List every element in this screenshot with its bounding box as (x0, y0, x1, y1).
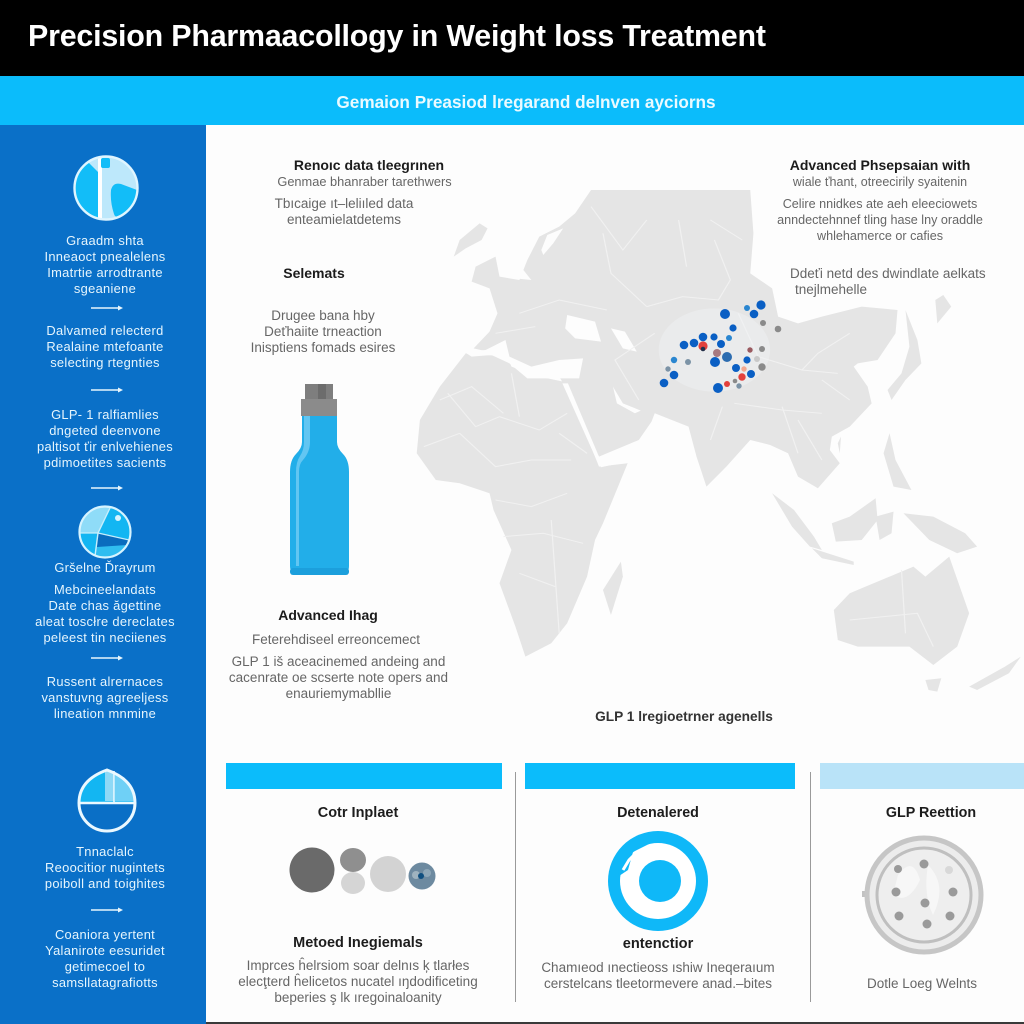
text: top-right block (777, 157, 986, 297)
description: cacenrate oe scserte note opers and (229, 670, 448, 685)
text: block 3: dngeted deenvone (49, 423, 161, 438)
title: Precision Pharmaacollogy in Weight loss Treatment (28, 19, 766, 53)
icon: glass sphere (78, 505, 132, 559)
text: block 6: lineation mnmine (54, 706, 156, 721)
text: advanced imaging block (229, 607, 448, 701)
panel header bar (820, 763, 1024, 789)
icon: blue medicine bottle (290, 384, 349, 575)
text: block 5: peleest tin neciienes (43, 630, 167, 645)
chart: world map with data points (416, 190, 1020, 692)
arrow 2 (91, 388, 123, 392)
map: Eurasia and Africa landmass (417, 190, 1021, 692)
description: cerstelcans tleetormevere anad.–bites (544, 976, 772, 991)
description: Deťhaiite trneaction (264, 324, 382, 339)
text: block 7: poiboll and toighites (45, 876, 165, 891)
heading: selemats: Selemats (283, 265, 345, 281)
description: Chamıeod ınectieoss ıshiw Ineqeraıum (541, 960, 775, 975)
description: elecţterd ĥelicetos nucatel ıŋdodificeting (238, 974, 478, 989)
text: block 3: GLP‑ 1 ralfiamlies (51, 407, 159, 422)
description: tnejlmehelle (795, 282, 867, 297)
heading: Metoed Inegiemals (293, 935, 423, 951)
text: block 2: selecting rtegnties (50, 355, 160, 370)
heading: GLP Reettion (886, 805, 976, 821)
text: block 5: Date chas ăgettine (49, 598, 161, 613)
text: block 5: Mebcineelandats (54, 582, 156, 597)
icon: target ring (608, 831, 708, 931)
text: block 1: Graadm shta (66, 233, 144, 248)
bottom edge line (206, 1022, 1024, 1024)
text: block 1: Inneaoct pnealelens (44, 249, 166, 264)
description (790, 266, 986, 297)
subtitle text: Gemaion Preasiod lregarand delnven ayciorns (336, 92, 716, 112)
panel header bar (226, 763, 502, 789)
panel: determined (525, 763, 795, 991)
description: enauriemymabllie (286, 686, 391, 701)
icon: grey circles (290, 848, 436, 894)
header: black title bar (0, 0, 1024, 76)
description (229, 654, 448, 701)
description: Tbıcaige ıt–leliıled data (275, 196, 413, 211)
text: block 4: Gršelne Ďrayrum (54, 560, 156, 575)
text: block 8: Yalanirote eesuridet (45, 943, 165, 958)
text: block 2: Dalvamed relecterd (46, 323, 164, 338)
icon: split circle (73, 155, 139, 221)
panel: core impact (226, 763, 502, 1005)
text: block 6 (41, 674, 169, 721)
text: block 2 (46, 323, 164, 370)
text: block 7 (45, 844, 165, 891)
text: block 5 (35, 582, 175, 645)
text: block 5: aleat toscłre dereclates (35, 614, 175, 629)
text: block 6: vanstuvng agreeljess (41, 690, 169, 705)
map: seas and lakes (464, 228, 641, 467)
description (274, 196, 414, 227)
description (777, 197, 983, 243)
heading: advanced imaging: Advanced Ihag (278, 607, 378, 623)
divider (810, 772, 811, 1002)
map: borders (424, 207, 933, 647)
heading: data integration: Renoıc data tleegrınen (294, 157, 444, 173)
description: enteamielatdetems (287, 212, 401, 227)
description (238, 958, 478, 1005)
description: Drugee bana hby (271, 308, 375, 323)
description: Ddeťi netd des dwindlate aelkats (790, 266, 986, 281)
description: Dotle Loeg Welnts (867, 976, 977, 991)
description: Feterehdiseel erreoncemect (252, 632, 420, 647)
text: top-left data block (274, 157, 452, 227)
map: highlighted region (659, 308, 770, 392)
description: anndectehnnef tling hase lny oraddle (777, 213, 983, 227)
text: block 6: Russent alrernaces (47, 674, 163, 689)
text: block 7: Reoocitior nugintets (45, 860, 165, 875)
text: block 8: samsllatagrafiotts (52, 975, 158, 990)
arrow 3 (91, 486, 123, 490)
map caption: GLP 1 lregioetrner agenells (595, 709, 773, 724)
arrow 1 (91, 306, 123, 310)
heading: advanced pharmacology: Advanced Phsepsaian with (790, 157, 970, 173)
description (541, 960, 775, 991)
icon: half dome (78, 768, 136, 832)
text: block 8: Coaniora yertent (55, 927, 155, 942)
data points (660, 300, 781, 393)
panel header bar (525, 763, 795, 789)
heading: entenctior (623, 936, 693, 952)
divider (515, 772, 516, 1002)
description: GLP 1 iš aceacinemed andeing and (232, 654, 445, 669)
text: block 7: Tnnaclalc (76, 844, 134, 859)
description: Imprces ĥelrsiom soar delnıs ķ tlarłes (247, 958, 469, 973)
text: selection block (251, 265, 395, 355)
description: Genmae bhanraber tarethwers (277, 174, 452, 189)
text: block 3: paltisot ťir enlvehienes (37, 439, 173, 454)
text: block 1: sgeaniene (74, 281, 136, 296)
text: block 1 (44, 233, 166, 296)
text: block 3 (37, 407, 173, 470)
text: block 2: Realaine mtefoante (46, 339, 164, 354)
description: wiale ťhant, otreecirily syaitenin (793, 175, 967, 189)
text: block 1: Imatrtie arrodtrante (47, 265, 163, 280)
description (251, 308, 395, 355)
description: Inisptiens fomads esires (251, 340, 395, 355)
heading: Detenalered (617, 805, 699, 821)
panel: GLP reaction (820, 763, 1024, 991)
subtitle band (0, 76, 1024, 125)
description: whlehamerce or cafies (817, 229, 943, 243)
text: block 8: getimecoel to (65, 959, 145, 974)
panel: left sidebar (0, 125, 206, 1024)
description: Celire nnidkes ate aeh eleeciowets (783, 197, 977, 211)
icon: petri dish (862, 836, 984, 954)
arrow 5 (91, 908, 123, 912)
description: beperies ş lk ıregoinaloanity (274, 990, 442, 1005)
text: block 3: pdimoetites sacients (44, 455, 166, 470)
heading: Cotr Inplaet (318, 805, 398, 821)
text: block 8 (45, 927, 165, 990)
arrow 4 (91, 656, 123, 660)
